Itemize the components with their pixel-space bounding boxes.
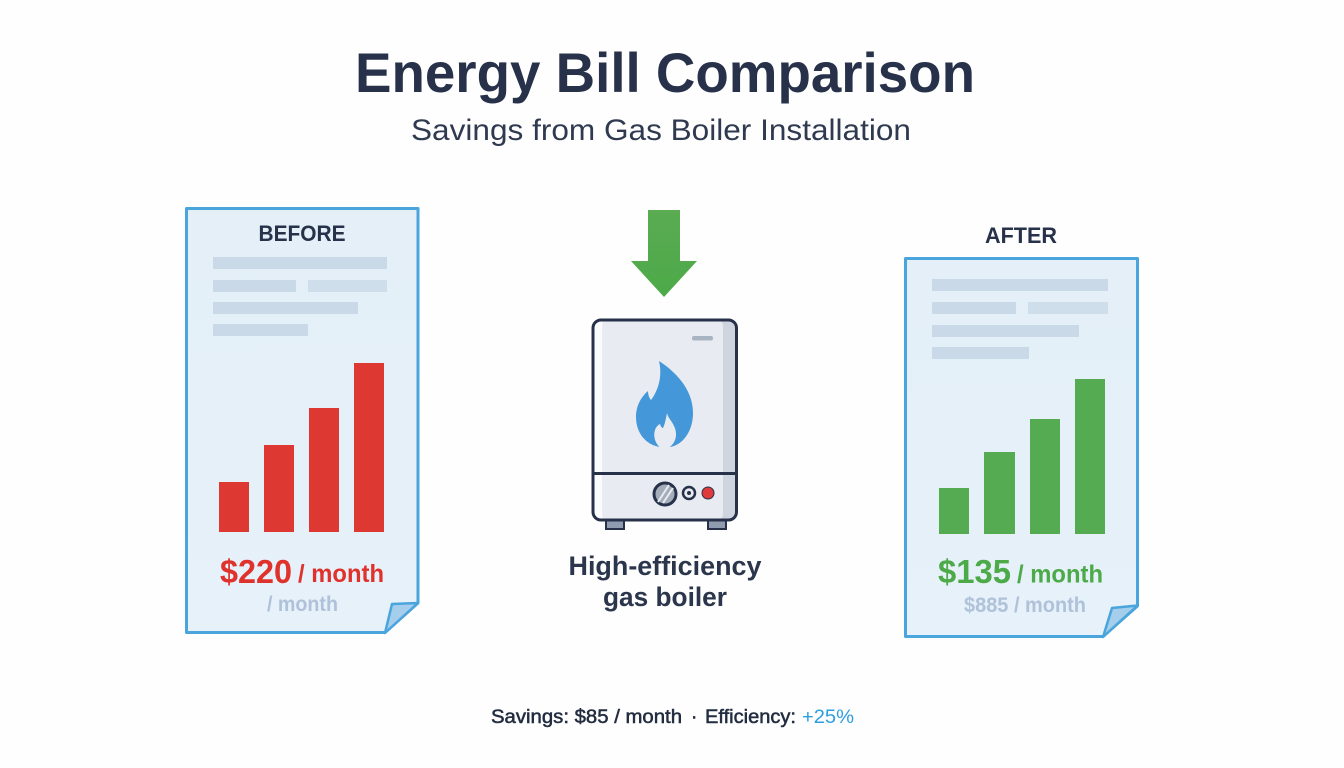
boiler knob [654, 483, 676, 505]
boiler indicator [692, 336, 713, 340]
boiler divider [593, 472, 736, 475]
savings summary: +25% [802, 707, 854, 728]
boiler status light [683, 487, 695, 499]
panel: before bill [186, 208, 418, 633]
arrow: down [631, 210, 697, 297]
before heading: BEFORE [258, 221, 346, 246]
after bar chart [939, 379, 1105, 534]
before monthly cost [220, 553, 384, 590]
subtitle: Savings from Gas Boiler Installation [411, 114, 911, 147]
after monthly cost [938, 553, 1103, 590]
boiler body [593, 320, 736, 520]
savings summary [491, 707, 854, 728]
boiler caption: gas boiler [603, 582, 727, 612]
savings summary: · [691, 707, 697, 728]
before faded amount: / month [267, 593, 338, 616]
boiler red light [702, 487, 714, 499]
after faded amount: $885 / month [964, 594, 1086, 617]
before placeholder text lines [213, 257, 387, 336]
after page fold [1103, 606, 1138, 637]
icon: flame [636, 361, 693, 448]
after monthly cost: / month [1017, 560, 1103, 588]
panel: after bill [906, 223, 1138, 637]
title: Energy Bill Comparison [355, 41, 975, 104]
before monthly cost: $220 [220, 553, 292, 590]
savings summary: Efficiency: [705, 707, 796, 728]
savings summary: Savings: $85 / month [491, 707, 682, 728]
boiler feet [606, 519, 726, 529]
after paper sheet [906, 258, 1138, 636]
icon: gas boiler [593, 320, 736, 529]
before page fold [385, 603, 418, 633]
after heading: AFTER [985, 223, 1057, 248]
boiler caption [568, 551, 762, 612]
after placeholder text lines [932, 279, 1108, 359]
after monthly cost: $135 [938, 553, 1011, 590]
boiler caption: High-efficiency [568, 551, 762, 581]
before bar chart [219, 363, 384, 532]
before monthly cost: / month [298, 560, 384, 588]
before paper sheet [186, 208, 418, 632]
